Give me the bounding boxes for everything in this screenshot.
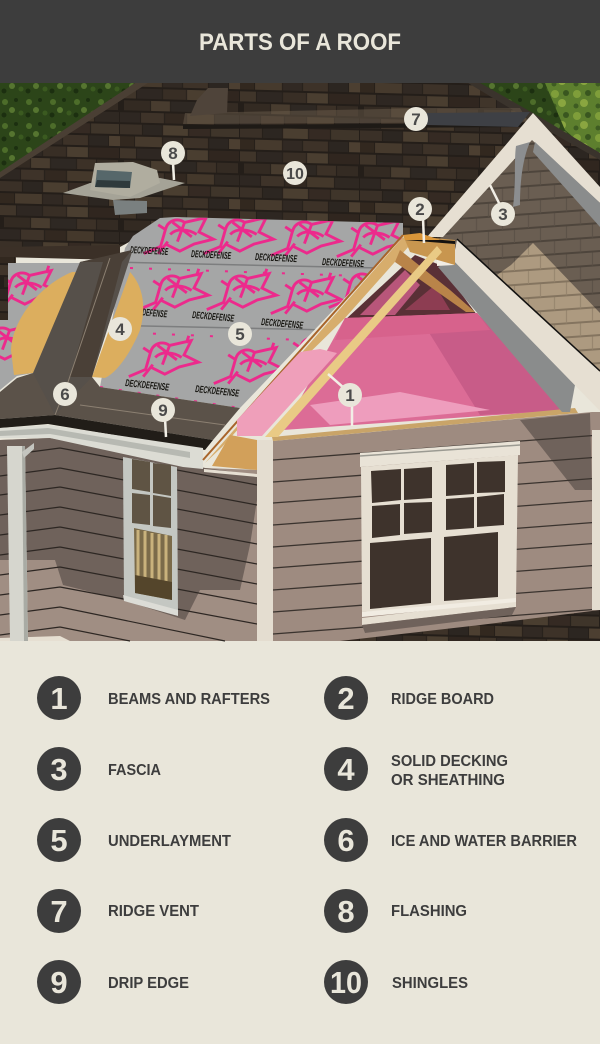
roof vent flashing bbox=[63, 162, 185, 215]
left window bbox=[123, 457, 178, 616]
marker 10: 10 bbox=[286, 166, 304, 183]
legend item 2 bbox=[324, 676, 494, 720]
window panes bbox=[370, 461, 505, 609]
legend item 8: 8 bbox=[337, 894, 355, 929]
title: PARTS OF A ROOF bbox=[199, 29, 401, 56]
marker 2 bbox=[408, 197, 432, 221]
legend item 10 bbox=[324, 960, 468, 1004]
pink attic insulation bbox=[283, 313, 568, 430]
marker 10 bbox=[283, 161, 307, 185]
right window bbox=[360, 441, 520, 633]
dormer shingles at left bbox=[0, 257, 16, 322]
legend item 1: BEAMS AND RAFTERS bbox=[108, 691, 270, 708]
legend item 7: 7 bbox=[50, 894, 68, 929]
header bar bbox=[0, 0, 600, 83]
osb rafter block bbox=[212, 435, 257, 470]
marker 9 bbox=[151, 398, 175, 422]
legend item 7 bbox=[37, 889, 200, 933]
legend item 5 bbox=[37, 818, 232, 862]
corner trim bbox=[257, 440, 273, 641]
marker 3: 3 bbox=[498, 205, 508, 224]
legend item 1: 1 bbox=[50, 681, 68, 716]
legend item 5: UNDERLAYMENT bbox=[108, 833, 232, 850]
marker 2: 2 bbox=[415, 200, 425, 219]
underlayment brand text: DECKDEFENSE bbox=[127, 306, 168, 320]
gutter and downspout bbox=[0, 425, 203, 641]
legend item 1 bbox=[37, 676, 270, 720]
underlayment brand text: DECKDEFENSE bbox=[195, 384, 240, 400]
ridge vent bbox=[427, 112, 530, 127]
legend item 3: 3 bbox=[50, 752, 68, 787]
marker 6: 6 bbox=[60, 385, 70, 404]
underlayment brand text: DECKDEFENSE bbox=[255, 252, 298, 265]
trees bbox=[0, 83, 600, 183]
pink rafter insulation bbox=[237, 349, 337, 436]
legend panel bbox=[37, 676, 577, 1004]
front rafter bbox=[265, 246, 442, 437]
back gable siding wall bbox=[440, 135, 600, 400]
marker 9: 9 bbox=[158, 401, 168, 420]
dormer roof band bbox=[0, 245, 120, 260]
legend item 4 bbox=[324, 747, 508, 791]
marker 7: 7 bbox=[411, 110, 421, 129]
front wall plate bbox=[272, 408, 578, 441]
legend item 10: SHINGLES bbox=[392, 975, 468, 992]
ice and water barrier bbox=[0, 250, 240, 440]
marker 1: 1 bbox=[345, 386, 355, 405]
underlayment brand text: DECKDEFENSE bbox=[261, 317, 304, 332]
marker 8: 8 bbox=[168, 144, 178, 163]
right house wall bbox=[273, 412, 600, 641]
legend item 2: 2 bbox=[337, 681, 355, 716]
underlayment brand text: DECKDEFENSE bbox=[125, 378, 170, 394]
legend item 6 bbox=[324, 818, 577, 862]
underlayment bbox=[0, 213, 406, 408]
legend item 4: OR SHEATHING bbox=[391, 772, 505, 789]
beams and rafters bbox=[203, 233, 475, 470]
underlayment brand text: DECKDEFENSE bbox=[322, 257, 365, 270]
legend item 9 bbox=[37, 960, 189, 1004]
lower roof shingles bbox=[340, 610, 600, 641]
marker 1 bbox=[338, 383, 362, 407]
back gable fascia trim bbox=[427, 113, 600, 237]
underlayment brand text: DECKDEFENSE bbox=[191, 249, 232, 262]
solid decking osb bbox=[11, 272, 143, 378]
legend item 7: RIDGE VENT bbox=[108, 903, 200, 920]
marker 4: 4 bbox=[115, 320, 125, 339]
legend item 2: RIDGE BOARD bbox=[391, 691, 494, 708]
pink underlayment logos bbox=[0, 213, 406, 408]
underlayment brand text bbox=[125, 245, 365, 400]
underlayment brand text: DECKDEFENSE bbox=[192, 310, 235, 325]
legend item 4: 4 bbox=[337, 752, 355, 787]
drip edge band bbox=[0, 415, 213, 450]
marker leader lines bbox=[165, 163, 500, 437]
marker 7 bbox=[404, 107, 428, 131]
gap under eave bbox=[204, 469, 257, 477]
legend item 6: 6 bbox=[337, 823, 355, 858]
left house wall bbox=[0, 438, 257, 641]
marker 3 bbox=[491, 202, 515, 226]
main shingled roof bbox=[0, 83, 600, 250]
roof illustration bbox=[0, 83, 600, 641]
legend item 3 bbox=[37, 747, 161, 791]
window head casing bbox=[360, 441, 520, 467]
marker 6 bbox=[53, 382, 77, 406]
legend item 8 bbox=[324, 889, 467, 933]
legend item 10: 10 bbox=[330, 965, 362, 1000]
marker 5 bbox=[228, 322, 252, 346]
legend item 5: 5 bbox=[50, 823, 68, 858]
window sill bbox=[362, 600, 516, 625]
gable soffit and fascia bbox=[437, 239, 600, 412]
legend item 6: ICE AND WATER BARRIER bbox=[391, 833, 577, 850]
marker 8 bbox=[161, 141, 185, 165]
legend item 3: FASCIA bbox=[108, 762, 161, 779]
legend item 8: FLASHING bbox=[391, 903, 467, 920]
legend item 4: SOLID DECKING bbox=[391, 753, 508, 770]
marker 4 bbox=[108, 317, 132, 341]
underlayment brand text: DECKDEFENSE bbox=[130, 245, 169, 258]
attic cavity bbox=[345, 255, 477, 320]
legend item 9: 9 bbox=[50, 965, 68, 1000]
marker 5: 5 bbox=[235, 325, 245, 344]
legend item 9: DRIP EDGE bbox=[108, 975, 189, 992]
